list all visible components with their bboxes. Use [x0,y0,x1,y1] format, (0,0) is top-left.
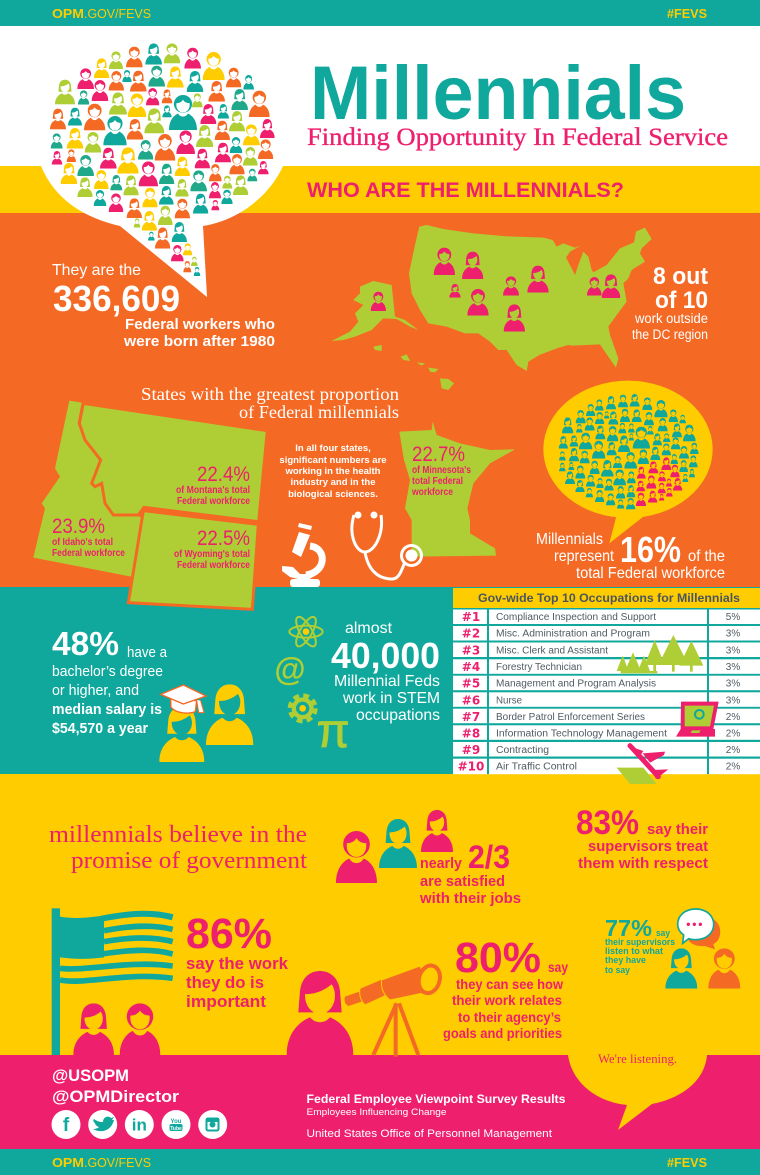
stat: 16 percent: Millennials [536,531,603,548]
icon: two people talking [665,909,740,989]
stat: 77 percent [605,915,675,976]
map: Alaska [332,281,418,341]
icon: two people under the flag [73,1003,160,1055]
stat: 16 percent: of the [688,548,725,565]
speech bubble: 16 percent of workforce [543,381,713,543]
white header background [0,26,760,166]
stat: nearly 2/3 satisfied: nearly [420,856,462,872]
map: Idaho [33,401,143,577]
stat: 86 percent: 86% [186,910,272,958]
icon: trees [617,635,703,673]
percent column: 2% [726,712,740,723]
survey credits [306,1092,566,1140]
map: Montana [79,403,267,522]
stat: 8 out of 10: 8 out [653,263,708,290]
stat: Minnesota: workforce [411,487,453,498]
stat: 48 percent bachelor's degree: 48% [52,625,119,662]
stat: Idaho: of Idaho's total [52,537,113,548]
icon: graduates with cap [159,684,253,762]
stat: nearly 2/3 satisfied: are satisfied [420,873,505,890]
subtitle: Finding Opportunity In Federal Service [307,124,728,151]
top hashtag: #FEVS [667,6,707,21]
heading: millennials believe in the promise of government: millennials believe in the [49,822,307,848]
stat: 48 percent bachelor's degree: have a [127,644,168,661]
stat: Montana: 22.4% [197,463,250,486]
stat: 336,609 federal workers [52,262,275,350]
stat: 80 percent: to their agency’s [458,1009,561,1025]
stat: Montana: Federal workforce [177,496,250,507]
map: Minnesota [399,422,515,557]
stat: almost 40,000 in STEM [331,620,440,724]
occupation column: Contracting [496,745,549,756]
stat: 83 percent respect [576,804,708,872]
footer handles: @OPMDirector [52,1087,179,1106]
rank column: #4 [462,660,480,674]
stat: 8 out of 10: the DC region [632,327,708,342]
stat: almost 40,000 in STEM: work in STEM [342,690,440,707]
icon: flag pole lower part [52,1000,60,1055]
table header: Gov-wide Top 10 Occupations for Millennials [478,591,740,605]
rank column: #6 [462,693,480,707]
rank column: #10 [458,760,484,774]
pink footer background [0,1055,760,1149]
icon: gear [290,696,315,721]
icon: laptop [676,702,719,737]
heading: states with greatest proportion: States with the greatest proportion [141,384,399,404]
stat: 77 percent: they have [605,955,646,966]
stat: 86 percent: they do is [186,973,264,992]
occupation column: Forestry Technician [496,662,582,673]
icon: people on map [371,248,620,332]
stat: almost 40,000 in STEM: occupations [356,707,440,724]
icon: facebook: f [63,1115,70,1136]
stat: 336,609 federal workers: Federal workers who [125,316,275,333]
heading: who are the millennials: WHO ARE THE MILLENNIALS? [307,178,624,202]
title: Millennials [310,51,686,136]
survey credits: Federal Employee Viewpoint Survey Results [306,1092,566,1106]
stat: 77 percent: their supervisors [605,937,675,948]
occupation column: Management and Program Analysis [496,679,656,690]
stat: 80 percent [443,934,568,1041]
stat: almost 40,000 in STEM: 40,000 [331,635,440,676]
stat: Wyoming: 22.5% [197,527,250,550]
stat: 80 percent: say [548,959,568,975]
rank column: #3 [462,643,480,657]
stat: 80 percent: they can see how [456,976,563,992]
stat: Wyoming: Federal workforce [177,560,250,571]
stat: 8 out of 10: of 10 [655,287,708,314]
icon: linkedin [125,1110,154,1139]
stat: 77 percent: 77% [605,915,652,941]
stat: 86 percent [186,910,289,1011]
stat: 336,609 federal workers: 336,609 [53,278,180,319]
stat: Montana [176,463,250,507]
stat: Minnesota: 22.7% [412,443,465,466]
stat: 83 percent respect: them with respect [578,855,708,872]
yellow heading band [0,166,760,213]
bottom link: .GOV/FEVS [84,1155,151,1170]
stat: 86 percent: say the work [186,954,289,973]
stat: 80 percent: their work relates [452,992,562,1008]
stat: 48 percent bachelor's degree: bachelor’s degree [52,663,163,680]
stat: Wyoming [174,527,250,571]
stat: nearly 2/3 satisfied: with their jobs [419,890,521,907]
text: in all four states: significant numbers are [279,455,387,466]
map of the United States with people [332,225,652,390]
icon: linkedin: in [132,1116,147,1134]
top link: OPM [52,6,84,21]
top link [52,6,151,21]
table rows [453,610,760,774]
rank column: #2 [462,627,480,641]
stat: Minnesota [411,443,471,498]
occupation column: Information Technology Management [496,728,667,739]
stat: Montana: of Montana's total [176,485,250,496]
text: in all four states: industry and in the [291,477,375,488]
orange section background [0,213,760,587]
stat: 48 percent bachelor's degree [52,625,168,737]
percent column: 3% [726,679,740,690]
stat: 80 percent: goals and priorities [443,1025,562,1041]
icon: youtube [162,1110,190,1139]
percent column: 2% [726,745,740,756]
top link: .GOV/FEVS [84,6,151,21]
occupation column: Nurse [496,695,522,706]
icon: person with telescope [287,963,443,1057]
stat: 80 percent: 80% [455,934,541,982]
occupation column: Compliance Inspection and Support [496,612,656,623]
occupation column: Misc. Administration and Program [496,629,650,640]
bottom link [52,1155,151,1170]
icon: facebook [52,1110,80,1139]
rank column [458,610,484,774]
icon: crowd of coloured people [50,43,275,276]
stat: 48 percent bachelor's degree: median salary is [52,701,162,718]
stat: 48 percent bachelor's degree: or higher, and [52,682,139,699]
occupation column: Air Traffic Control [496,762,577,773]
text: in all four states: working in the health [284,466,381,477]
stat: nearly 2/3 satisfied: 2/3 [468,839,510,875]
rank column: #5 [462,677,480,691]
heading: states with greatest proportion [141,384,399,422]
rank column: #8 [462,726,480,740]
icon: atom [289,614,323,649]
stat: Minnesota: of Minnesota's [412,465,471,476]
table: top 10 occupations [453,588,760,774]
stat: 336,609 federal workers: They are the [52,262,141,279]
bottom bar [0,1149,760,1175]
teal section background [0,587,760,774]
icon: twitter [88,1110,117,1139]
top bar [0,0,760,26]
survey credits: Employees Influencing Change [306,1107,446,1118]
text: in all four states: In all four states, [295,443,371,454]
bottom link: OPM [52,1155,84,1170]
stat: almost 40,000 in STEM: almost [345,620,393,637]
stat: 8 out of 10: work outside [634,311,708,326]
rank column: #7 [462,710,480,724]
stat: 77 percent: say [656,928,670,938]
stat: 77 percent: listen to what [605,946,664,957]
icon: pi: π [316,705,350,758]
stat: 8 out of 10 [632,263,708,342]
speech bubble: we're listening [568,1052,707,1130]
icon: youtube: Tube [170,1126,182,1132]
stat: 48 percent bachelor's degree: $54,570 a year [52,720,148,737]
map: Wyoming [128,511,258,609]
percent column: 3% [726,662,740,673]
icon: three satisfied people [336,810,453,883]
speech bubble with crowd of millennials [41,38,283,297]
icon: instagram [198,1110,227,1139]
speech bubble: we're listening: We're listening. [598,1052,677,1066]
stat: Idaho [52,515,125,559]
stat: Idaho: Federal workforce [52,548,125,559]
yellow section background [0,774,760,1055]
footer handles [52,1066,179,1106]
stat: 336,609 federal workers: were born after 1980 [123,333,275,350]
text: in all four states [279,443,387,500]
stat: nearly 2/3 satisfied [419,839,521,907]
icon: youtube: You [171,1119,182,1125]
percent column: 5% [726,612,740,623]
stat: 83 percent respect: say their [647,821,708,838]
icon: airplane and runway [617,746,668,784]
percent column: 3% [726,695,740,706]
map: Hawaii [373,345,454,390]
stat: 16 percent: total Federal workforce [576,565,725,582]
stat: Wyoming: of Wyoming's total [174,549,250,560]
icon: crowd with minority highlighted [559,394,699,509]
icon: stethoscope [352,512,422,579]
text: in all four states: biological sciences. [288,489,378,500]
stat: Idaho: 23.9% [52,515,105,538]
bottom hashtag: #FEVS [667,1155,707,1170]
social icons [52,1110,227,1139]
stat: almost 40,000 in STEM: Millennial Feds [334,673,440,690]
icon: flag [52,908,173,1000]
percent column: 3% [726,629,740,640]
stat: Minnesota: total Federal [412,476,463,487]
heading: millennials believe in the promise of government [49,822,307,874]
stat: 16 percent: 16% [620,529,681,570]
stat: 86 percent: important [186,992,266,1011]
survey credits: United States Office of Personnel Management [306,1128,552,1140]
percent column: 2% [726,728,740,739]
footer handles: @USOPM [52,1066,129,1085]
heading: millennials believe in the promise of government: promise of government [71,848,307,874]
icon: microscope [282,523,322,587]
icon: at sign: @ [274,651,306,687]
stat: 83 percent respect: 83% [576,804,639,842]
stat: 16 percent [536,529,725,582]
rank column: #1 [462,610,480,624]
rank column: #9 [462,743,480,757]
stat: 83 percent respect: supervisors treat [588,838,708,855]
stat: 77 percent: to say [605,965,631,976]
map: contiguous US [409,225,652,371]
percent column: 3% [726,645,740,656]
heading: states with greatest proportion: of Federal millennials [239,402,399,422]
occupation column: Misc. Clerk and Assistant [496,645,608,656]
table header [453,588,760,608]
percent column [726,612,740,773]
occupation column: Border Patrol Enforcement Series [496,712,645,723]
percent column: 2% [726,762,740,773]
occupation column [496,612,667,773]
stat: 16 percent: represent [554,548,614,565]
